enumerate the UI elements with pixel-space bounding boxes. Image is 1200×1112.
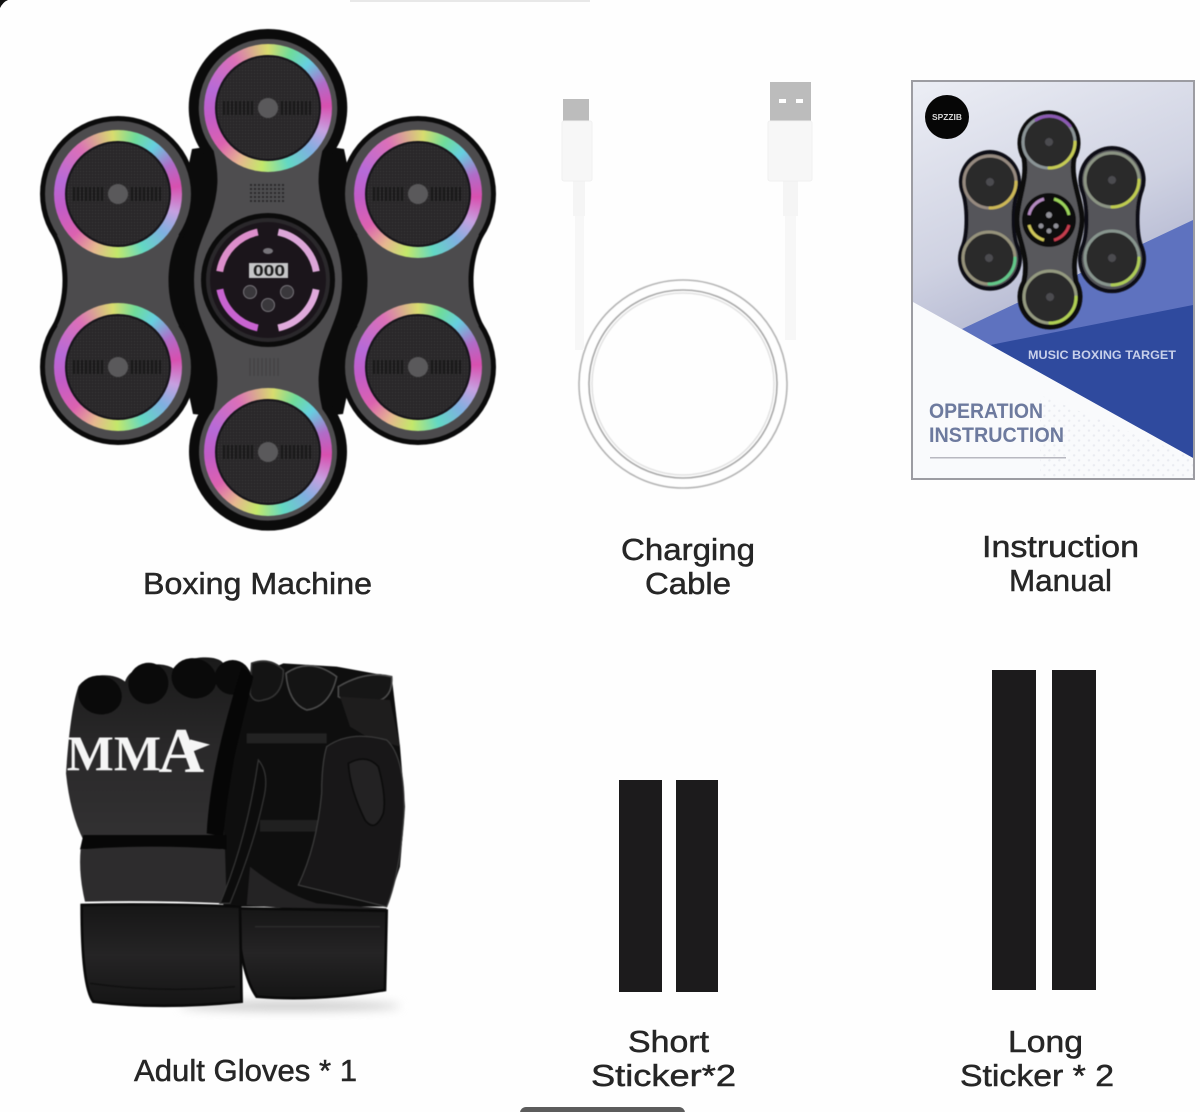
left lobe	[40, 116, 196, 445]
bottom scrollbar pill	[520, 1107, 685, 1112]
manual title text: INSTRUCTION	[929, 424, 1064, 447]
blue bands	[962, 220, 1193, 458]
top edge remnant	[350, 0, 590, 2]
logo badge: SPZZIB	[932, 113, 962, 122]
manual title text: MUSIC BOXING TARGET	[1028, 350, 1176, 362]
logo badge	[925, 95, 969, 139]
top-left corner remnant	[0, 0, 8, 8]
ring pad: bottom	[204, 388, 332, 516]
lower grille	[250, 358, 278, 376]
label: short sticker: Sticker*2	[591, 1058, 736, 1093]
label: long sticker	[960, 1024, 1114, 1093]
label: instruction manual: Manual	[1009, 563, 1112, 598]
panel: short stickers	[619, 780, 718, 992]
label: adult gloves: Adult Gloves * 1	[134, 1053, 357, 1088]
ground shadow	[180, 1001, 400, 1011]
black chassis between lobes	[165, 146, 371, 416]
label: charging cable	[621, 532, 755, 601]
back glove	[223, 661, 405, 998]
cable loop	[579, 280, 787, 488]
ring pad: top	[204, 44, 332, 172]
manual title text	[929, 350, 1176, 447]
machine body	[39, 28, 497, 532]
glove logo: MM	[67, 725, 161, 781]
panel: MMA gloves	[65, 656, 406, 1016]
knuckle openings	[74, 653, 251, 719]
label: short sticker: Short	[628, 1024, 709, 1059]
manual title text: OPERATION	[929, 400, 1043, 423]
label: instruction manual: Instruction	[982, 529, 1139, 564]
label: charging cable: Cable	[645, 566, 731, 601]
panel: instruction manual	[911, 80, 1195, 480]
USB-A connector	[768, 82, 812, 340]
label: charging cable: Charging	[621, 532, 755, 567]
ring pad: upper right	[354, 130, 482, 258]
glove logo: A	[158, 716, 204, 786]
ring pad: lower left	[54, 303, 182, 431]
label: boxing machine: Boxing Machine	[143, 566, 372, 601]
control disc	[200, 212, 336, 348]
panel: boxing machine	[39, 28, 497, 532]
miniature machine	[960, 113, 1144, 327]
mini central body	[1017, 113, 1082, 327]
cover background	[912, 81, 1194, 479]
label: long sticker: Sticker * 2	[960, 1058, 1114, 1093]
panel: long stickers	[992, 670, 1096, 990]
front glove	[66, 653, 266, 1006]
speaker grille	[250, 185, 286, 201]
right lobe	[340, 116, 496, 445]
mini lobes	[960, 148, 1144, 291]
label: instruction manual	[982, 529, 1139, 598]
ring pad: lower right	[354, 303, 482, 431]
manual rule	[930, 457, 1066, 458]
panel: charging cable	[562, 82, 812, 490]
glove logo	[67, 716, 210, 786]
control disc: 000	[253, 263, 285, 280]
ring pad: upper left	[54, 130, 182, 258]
label: long sticker: Long	[1008, 1024, 1083, 1059]
label: short sticker	[591, 1024, 736, 1093]
white area	[913, 302, 1193, 478]
USB-C connector	[562, 99, 592, 350]
central body	[189, 34, 347, 526]
